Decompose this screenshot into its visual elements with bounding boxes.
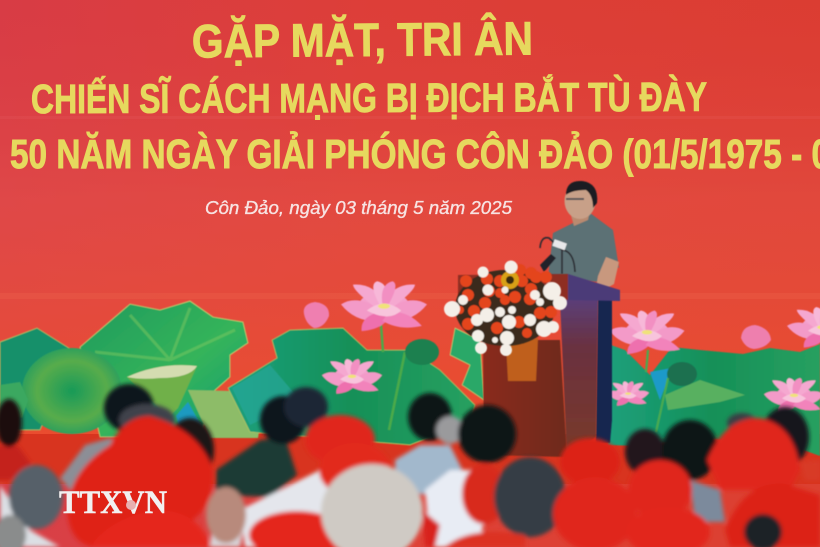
blue water right [650,368,672,400]
date line: Côn Đảo, ngày 03 tháng 5 năm 2025 [205,198,513,218]
man white shirt [425,405,516,547]
light water accent [232,365,300,425]
man in grey [60,384,154,500]
dark pod right [667,362,697,386]
stems right [646,350,668,432]
dark pod [405,339,439,365]
heads right [625,429,665,475]
lotus mural right [450,307,820,456]
lotus big [341,281,427,331]
red cap large [67,416,213,547]
lotus pod one top [127,365,197,379]
neck [570,210,590,226]
trousers [596,298,612,443]
man light blue shirt [395,393,465,497]
lotus pod two [188,390,263,438]
lotus f [787,307,820,348]
white hair head [321,464,423,547]
man dark jacket [216,387,328,497]
lotus pod one [127,365,197,416]
large leaf [80,301,248,437]
leaf veins [95,308,235,360]
red cap and head centre [462,464,506,524]
podium front [483,340,567,457]
lotus e [764,378,820,413]
white roses and orchids [444,260,567,356]
round leaf [22,348,122,434]
podium top [552,274,620,301]
grey haired head left [0,465,63,547]
podium panel [506,338,538,381]
blue water [176,402,208,438]
red cap centre [305,415,375,465]
green band [605,343,820,456]
leaf far left [0,328,72,430]
lotus bud right [741,325,771,349]
leaf behind podium [450,328,484,400]
lighter leaf [665,380,745,410]
arm [596,257,619,290]
face [564,183,596,219]
audience [0,384,820,547]
lotus bud [304,302,329,328]
speaker [540,181,619,443]
top box [458,274,568,300]
stage floor [0,434,820,484]
woman far left [0,399,32,480]
red cap right [707,418,800,490]
lotus mural left [0,281,475,445]
title: gặp mặt, tri ân: GẶP MẶT, TRI ÂN [192,12,533,67]
shirt [548,213,619,282]
middle leaf [228,328,475,445]
bare arm [206,487,246,543]
hair [566,181,597,208]
lotus d [607,381,649,406]
lotus c [610,310,684,354]
glasses [566,198,584,200]
grey hair behind [119,404,175,436]
logo: TTXVN watermark: TTXVN [59,485,167,521]
microphones [540,238,575,274]
podium [458,274,620,457]
podium side [560,300,598,457]
lotus small [322,359,382,394]
small leaf left edge [0,382,28,418]
sunflower [501,271,519,289]
stem [381,325,405,430]
white shirt [240,470,360,547]
flower arrangement [444,260,567,356]
